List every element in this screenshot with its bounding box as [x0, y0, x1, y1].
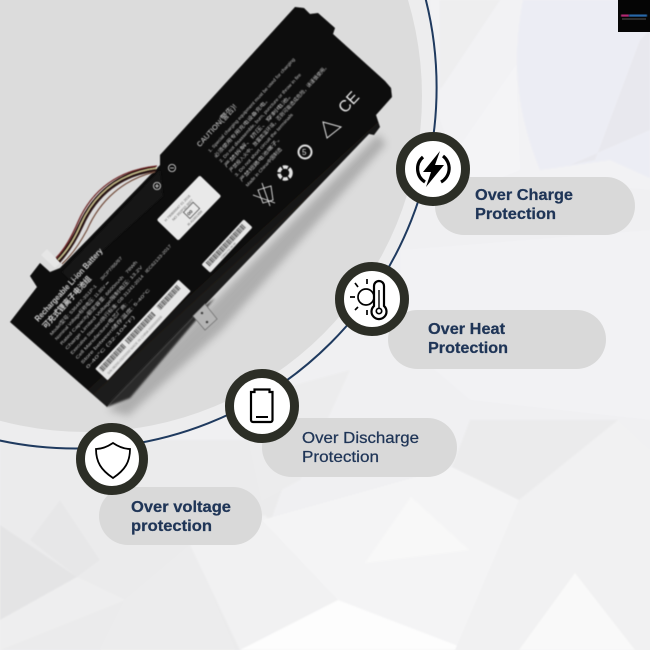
- white label: safety mark: R-41001959: [187, 210, 203, 227]
- callout: over voltage protection: [80, 428, 262, 545]
- barcode label: large: S/N 0B200-03200000 MADE IN CHINA 0000000000: [107, 315, 163, 375]
- pill: [435, 177, 635, 235]
- mark: plus terminal: [168, 164, 176, 172]
- white label: safety mark: [157, 175, 221, 241]
- battery text: model label: Charge Limited Voltage限制电压: 13.2V: [63, 263, 145, 351]
- battery text: caution block: CAUTION(警告)!: [195, 102, 238, 149]
- battery text: model label: Rated Capacity额定容量: 6600mAh 78Wh: [58, 259, 139, 347]
- battery text: caution block: 1. Special charging equipment must be used for charging: [207, 57, 297, 154]
- label: Over Charge: [475, 187, 573, 204]
- battery text: model label: 可充式锂离子电池组: [41, 274, 94, 330]
- battery text: model label: Model型号: 536467-3S1P-1 3ICP7/65/67: [48, 255, 124, 337]
- icon: low battery: [251, 390, 272, 422]
- logo badge: [618, 0, 650, 32]
- metal tab: [193, 304, 217, 330]
- mark: crossed bin: [253, 183, 275, 206]
- icon ring: [230, 374, 294, 438]
- battery text: caution block: Made in China中国制造: [244, 146, 284, 188]
- battery shadow: [108, 134, 386, 416]
- battery text: caution block: 严禁投入火中、放置高温环境，否则可能造成危险，请谨慎使用。: [228, 63, 330, 174]
- battery text: model label: Nominal Voltage标称电压: 11.55V ⎓: [53, 279, 111, 342]
- label: Protection: [302, 449, 379, 466]
- barcode label: large: [95, 280, 191, 380]
- callout: over discharge protection: [230, 374, 457, 477]
- battery text: model label: Store between储存温度: 5-40°C: [79, 286, 152, 365]
- panel: grey circle backdrop: [0, 0, 422, 432]
- icon: sun thermometer: [350, 279, 386, 319]
- label: Protection: [428, 340, 508, 357]
- mark: minus terminal: [153, 182, 161, 190]
- arc connector line: [0, 0, 437, 448]
- battery certification marks: [153, 89, 363, 206]
- mark: warning triangle: [323, 122, 341, 138]
- icon ring: [400, 136, 466, 202]
- lower edge highlight: [107, 298, 215, 407]
- white label: safety mark: ∞: [184, 206, 196, 218]
- white label: safety mark: H 790600047 01 2016: [164, 194, 191, 223]
- battery body: [10, 7, 392, 407]
- wires: [56, 166, 157, 264]
- label: Protection: [475, 206, 556, 223]
- barcode label: small: [201, 219, 253, 273]
- battery text: caution block: 必须使用专用充电设备充电。: [212, 96, 271, 159]
- battery text: model label: Executive Standard执行标准: GB 31241-2014 IEC62133-2017: [69, 243, 173, 356]
- mark: CE: CE: [335, 89, 363, 117]
- mark: recycle: [279, 167, 291, 179]
- battery text: model label: [32, 210, 189, 370]
- callout: over heat protection: [340, 266, 606, 369]
- icon: shield: [96, 443, 130, 478]
- callout: over charge protection: [400, 136, 635, 235]
- wire connector: [41, 249, 60, 268]
- battery text: model label: 0-40°C (32-104°F): [85, 314, 137, 370]
- battery text: model label: Cell Manufacturer电芯厂商: …: [74, 295, 134, 361]
- battery text: model label: Rechargeable Li-ion Battery: [33, 246, 105, 324]
- battery text: caution block: 严禁拆解、挤压、穿刺电池。: [223, 90, 295, 169]
- icon ring: [340, 266, 404, 332]
- panel: light band behind arc: [0, 0, 436, 448]
- label: protection: [131, 518, 212, 535]
- barcode label: small: C36N1711 09 00: [220, 241, 237, 260]
- label: Over Heat: [428, 321, 506, 338]
- pill: [99, 487, 262, 545]
- mark: numbered circle: 5: [302, 148, 307, 157]
- battery text: caution block: [195, 34, 346, 191]
- white label: safety mark: NO 3S2P32-3027: [172, 199, 194, 222]
- label: Over Discharge: [302, 430, 419, 447]
- icon: lightning: [418, 151, 449, 187]
- pill: [388, 310, 606, 369]
- battery photo: [10, 7, 392, 416]
- battery text: caution block: 严禁短路电池端子。: [238, 134, 284, 183]
- icon ring: [80, 428, 144, 490]
- body ridge: [62, 170, 163, 280]
- battery text: caution block: 3. Do not short circuit the terminals: [234, 112, 295, 178]
- mark: numbered circle: [298, 146, 312, 158]
- battery text: caution block: 2. Do not disassemble, burn, puncture or throw in fire: [218, 72, 303, 164]
- pill: [262, 418, 457, 477]
- label: Over voltage: [131, 499, 231, 516]
